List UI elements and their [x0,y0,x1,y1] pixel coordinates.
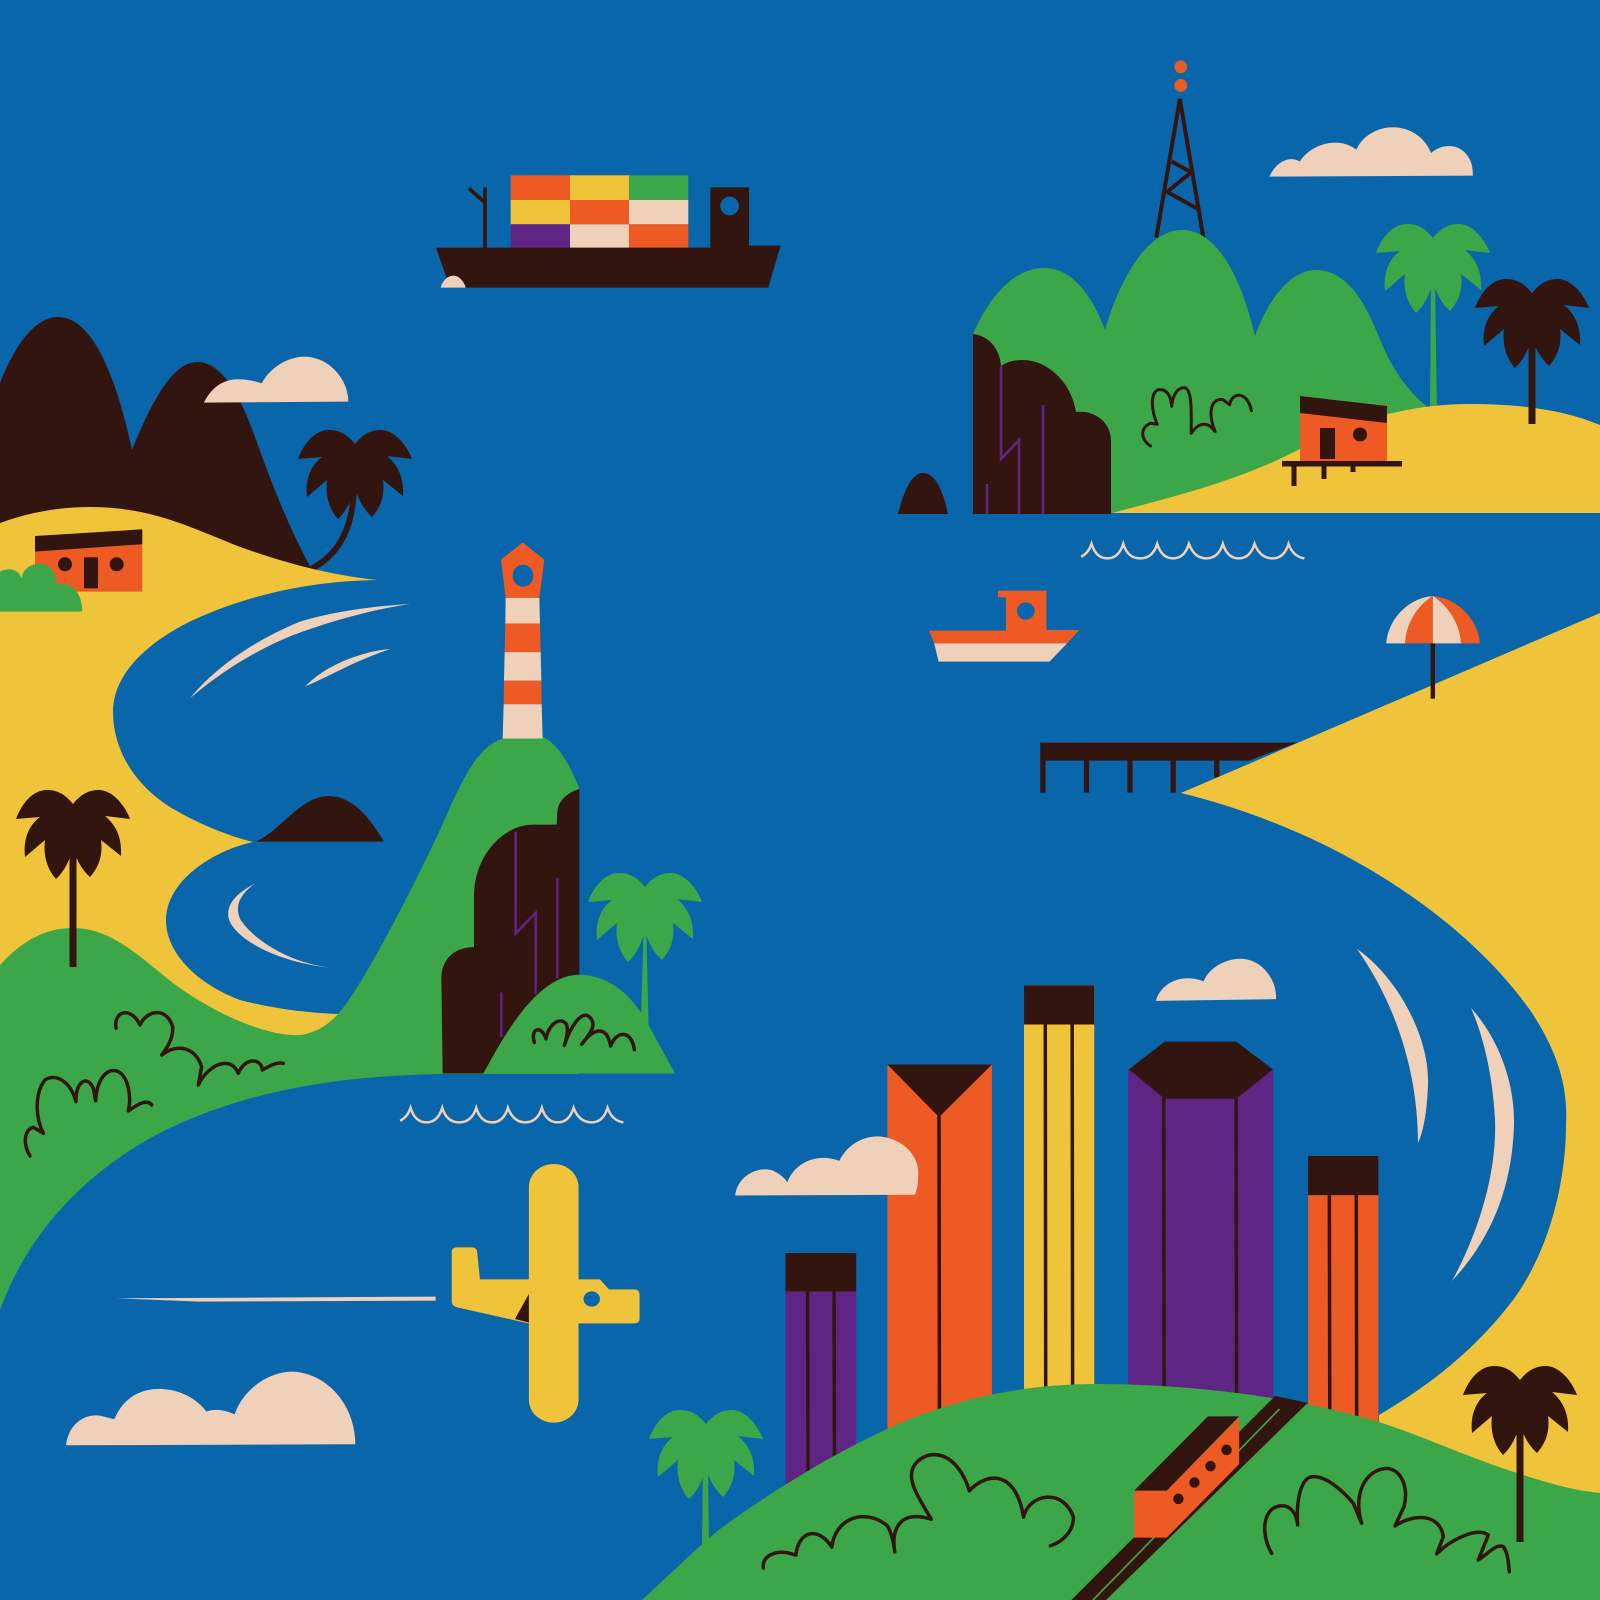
city green hill [642,1384,1600,1600]
funnel porthole [720,197,739,215]
bush outlines on left headland [25,1013,283,1156]
purple cliff cracks [501,832,557,1037]
small green palm near city [649,1410,763,1545]
beach umbrella [1386,596,1480,699]
small green palm [588,873,702,1030]
crescent wave in lower bay [228,883,330,968]
dark cliff [973,334,1111,514]
tower 1 purple [785,1253,856,1498]
lighthouse [501,542,544,739]
train car [1134,1416,1239,1538]
green hills [973,230,1432,513]
bow foam [441,276,466,288]
pier [1040,743,1297,793]
stilt house [1282,396,1402,486]
cloud: above purple tower [1156,959,1276,1001]
ship containers [511,175,688,248]
plane wing [529,1164,579,1423]
tower 2 orange [887,1064,992,1440]
small dark rock island [255,796,384,842]
airplane group [66,1164,640,1445]
lighthouse island group [441,542,702,1074]
bay wave swooshes [190,604,410,698]
small green hill [483,975,675,1074]
plane fuselage [452,1247,640,1323]
dark palm bottom right [1463,1366,1577,1542]
city skyline [785,985,1378,1498]
right bay crescents [1357,949,1514,1281]
left beach house [35,529,142,592]
ship hull and funnel [436,187,781,288]
dark palm on beach [1475,279,1589,424]
yellow beach [1112,404,1600,513]
cloud: in front of orange tower [735,1136,918,1196]
tower 3 yellow [1024,985,1094,1394]
purple cracks [987,366,1043,514]
railway and train group [763,1396,1308,1600]
cloud: top right [1270,127,1473,177]
plane contrail [116,1297,436,1302]
small rock [898,473,948,514]
left green headland [0,736,579,1310]
tug boat and pier [929,591,1297,793]
left palm tree on hump [16,790,130,967]
right yellow beach [1181,613,1600,1600]
water ripples below top island [1081,544,1304,558]
water ripples below lighthouse island [400,1108,623,1122]
radio tower [1156,60,1203,237]
left dark mountains [0,317,312,570]
top right island group [898,60,1600,514]
left yellow beach [0,507,377,1050]
ship mast [469,187,485,248]
tower 4 purple [1128,1042,1273,1401]
plane dark wedge [515,1293,529,1323]
cloud: below contrail [66,1372,355,1445]
dark cliff [441,789,579,1074]
tug boat [929,591,1079,662]
tower 5 orange [1308,1156,1378,1425]
bush outline: city hill left [763,1455,1073,1568]
green palm behind island [1376,224,1490,412]
container ship [436,175,781,288]
bush outline: city hill right [1265,1468,1509,1572]
left curved palm tree [298,430,412,568]
railway track [1071,1396,1308,1600]
left green shrub [0,564,82,612]
bush outline [1143,388,1251,446]
cloud: over left mountains [204,357,348,403]
bush outline on small hill [533,1015,634,1050]
plane window [584,1291,600,1307]
